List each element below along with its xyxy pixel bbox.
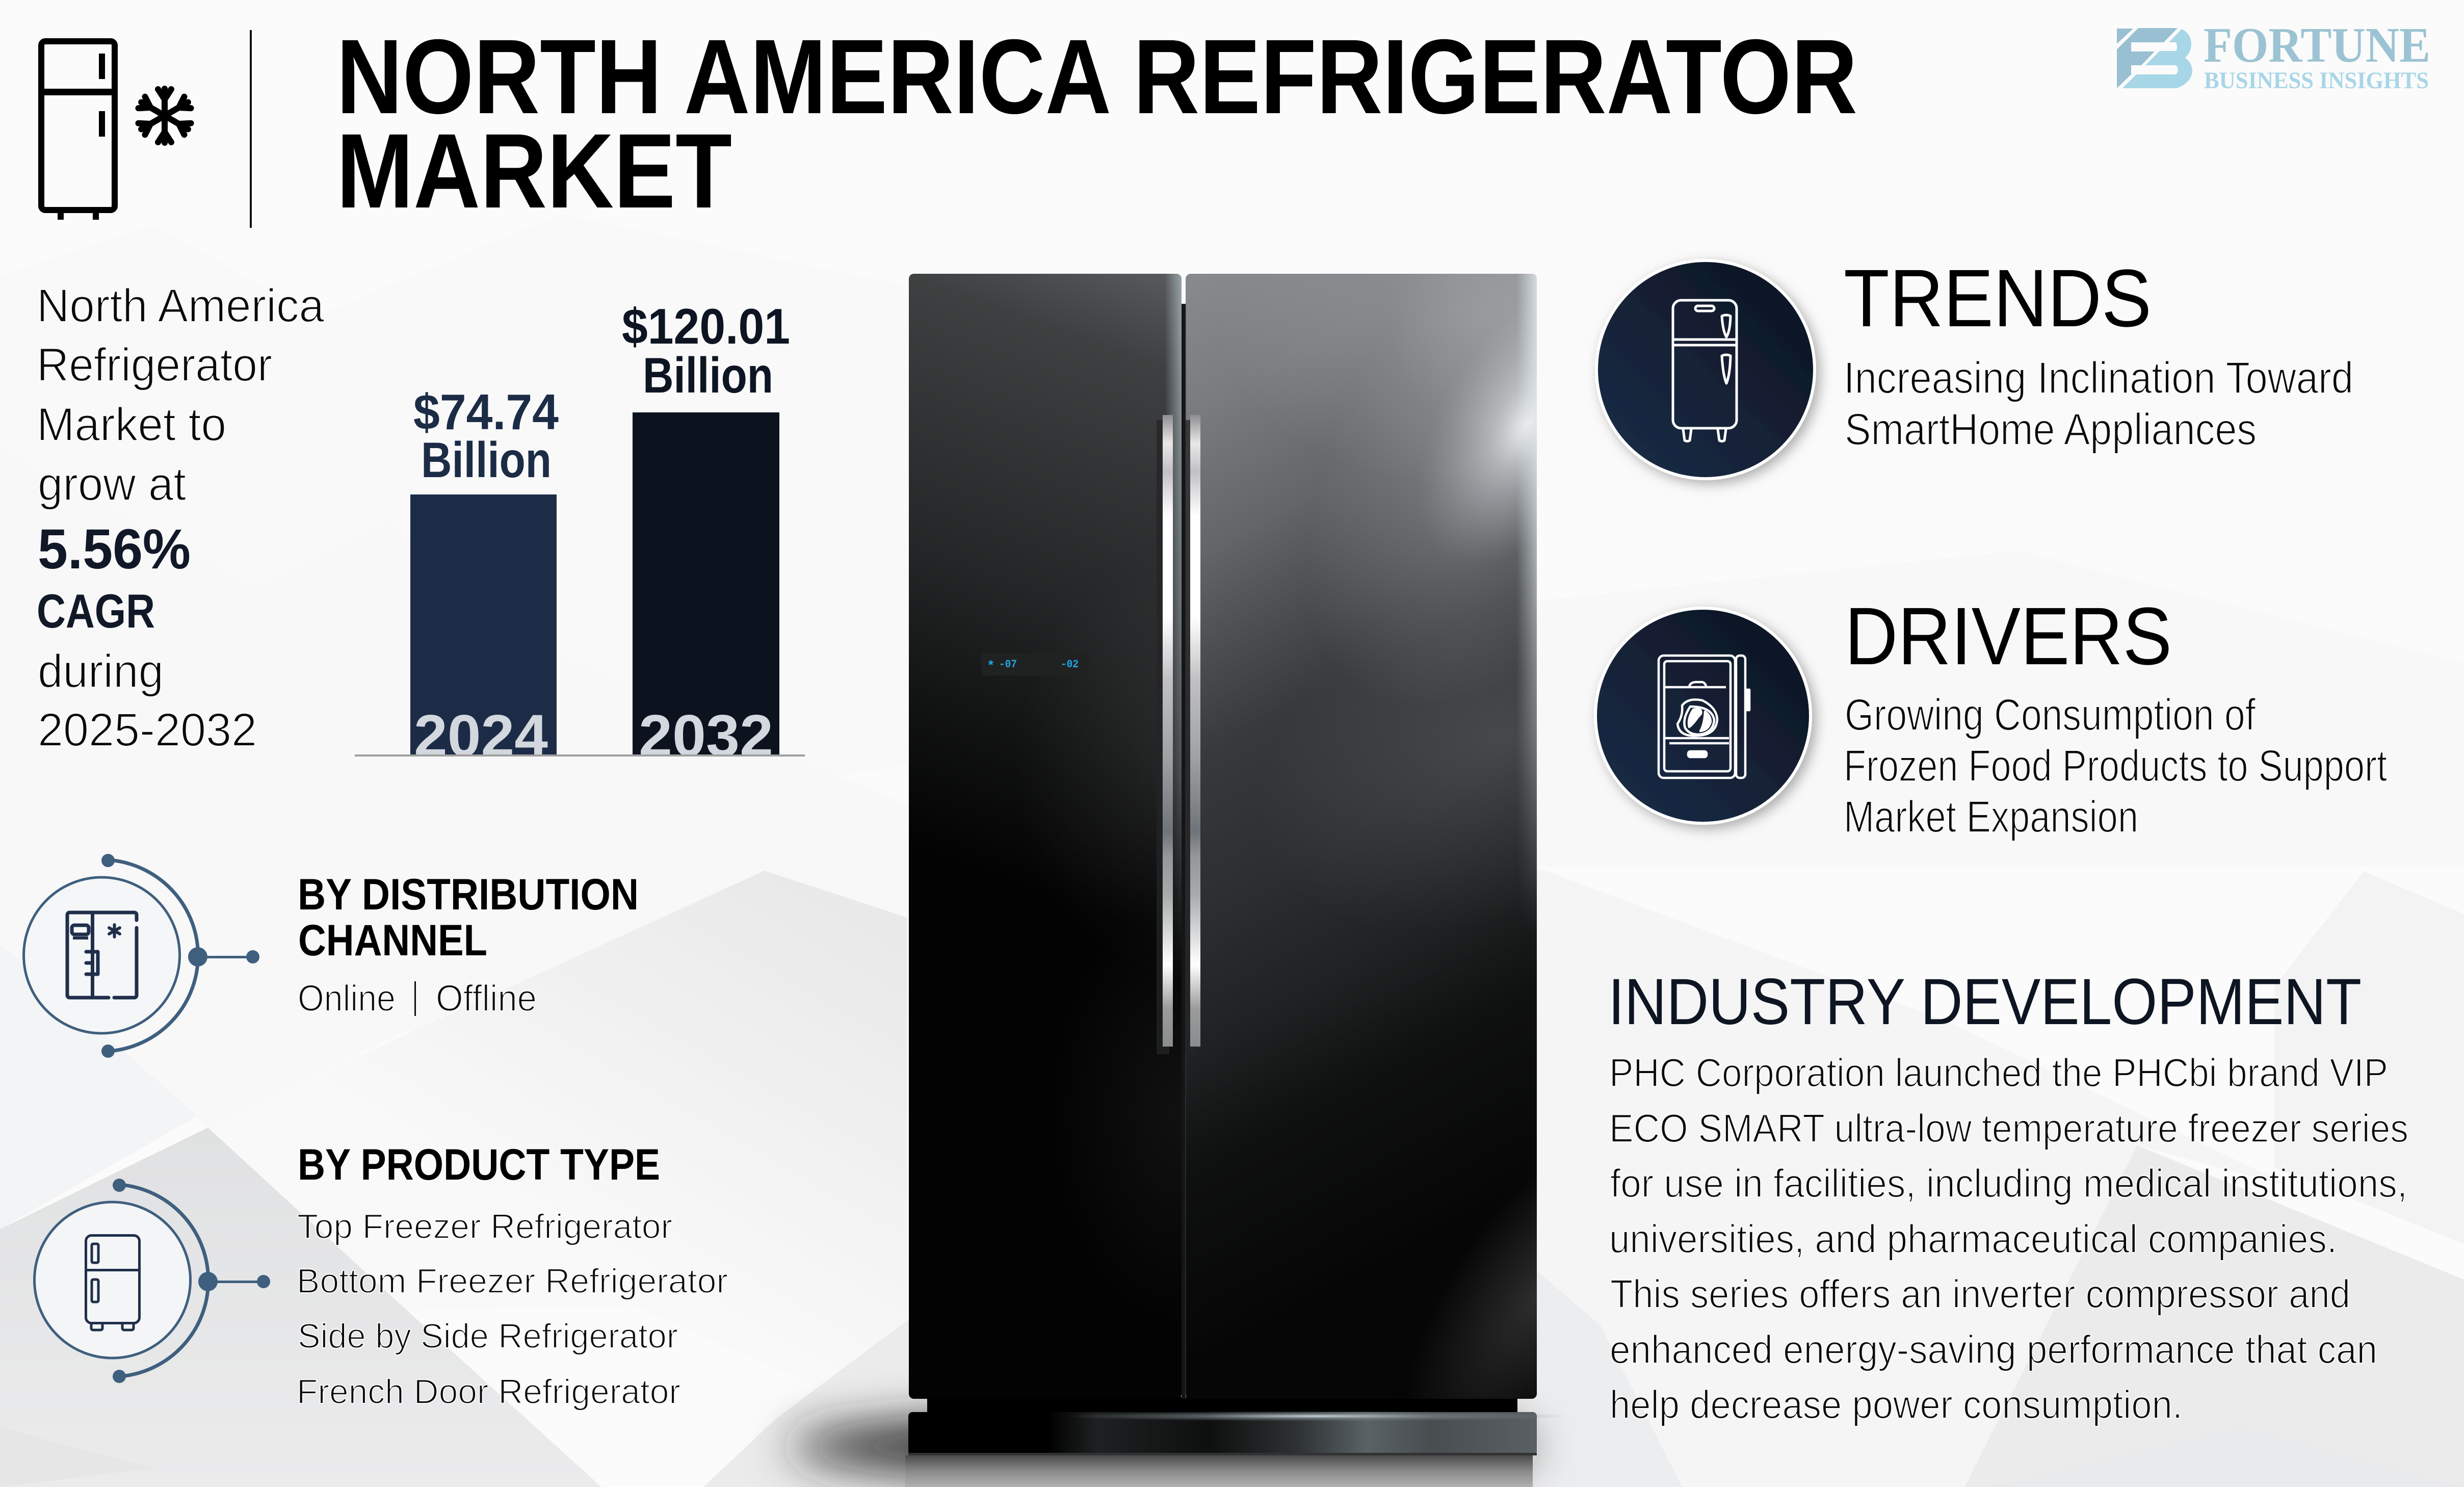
header divider bbox=[250, 30, 252, 228]
heading: trends: Increasing Inclination Toward bbox=[1844, 353, 2353, 403]
heading: trends: SmartHome Appliances bbox=[1845, 405, 2257, 454]
logo: Fortune Business Insights: FORTUNE bbox=[2204, 18, 2430, 72]
text block: by distribution channel: CHANNEL bbox=[298, 916, 487, 965]
text block: by distribution channel: Offline bbox=[436, 978, 537, 1019]
left door bbox=[909, 274, 1182, 1399]
plinth and base bbox=[908, 1397, 1572, 1455]
text block: industry development: INDUSTRY DEVELOPMENT bbox=[1608, 966, 2362, 1038]
text block: by product type: Top Freezer Refrigerator bbox=[297, 1207, 672, 1246]
bar chart: market size 2024 vs 2032: Billion bbox=[643, 347, 773, 403]
right door bbox=[1185, 274, 1537, 1399]
digital display bbox=[981, 653, 1088, 675]
text block: by product type: Bottom Freezer Refrigerator bbox=[297, 1262, 728, 1300]
text block: industry development: for use in facilities, including medical institutions, bbox=[1610, 1161, 2407, 1206]
title bbox=[336, 18, 1857, 230]
text block: by product type bbox=[297, 1140, 728, 1411]
text block: CAGR statement: CAGR bbox=[37, 584, 155, 638]
bar chart: market size 2024 vs 2032: 2024 bbox=[414, 702, 548, 769]
text block: industry development: enhanced energy-saving performance that can bbox=[1610, 1327, 2377, 1372]
text block: CAGR statement: Refrigerator bbox=[37, 339, 272, 391]
title: NORTH AMERICA REFRIGERATOR bbox=[336, 18, 1857, 136]
seam strip between doors bbox=[1182, 304, 1186, 1399]
text block: by product type: French Door Refrigerator bbox=[297, 1372, 680, 1411]
text block: industry development: PHC Corporation launched the PHCbi brand VIP bbox=[1609, 1050, 2388, 1095]
bar chart: market size 2024 vs 2032: Billion bbox=[421, 432, 552, 488]
text block: by product type: Side by Side Refrigerator bbox=[298, 1317, 678, 1355]
drivers circle icon bbox=[1595, 608, 1811, 823]
text block: CAGR statement: Market to bbox=[37, 399, 226, 451]
digital display: * bbox=[987, 659, 995, 674]
heading: drivers: Growing Consumption of bbox=[1845, 690, 2256, 740]
floor shadow bbox=[790, 1415, 1534, 1487]
door handles bbox=[1157, 415, 1200, 1054]
text block: CAGR statement: during bbox=[38, 645, 164, 697]
text block: industry development bbox=[1608, 966, 2408, 1427]
digital display: -02 bbox=[1061, 658, 1079, 671]
text block: CAGR statement: 5.56% bbox=[38, 518, 191, 581]
text block: CAGR statement: North America bbox=[37, 280, 325, 332]
text block: by product type: BY PRODUCT TYPE bbox=[298, 1140, 660, 1189]
logo: Fortune Business Insights: BUSINESS INSIGHTS bbox=[2204, 67, 2429, 94]
text block: industry development: help decrease power consumption. bbox=[1610, 1382, 2183, 1427]
text block: CAGR statement: 2025-2032 bbox=[38, 704, 257, 756]
text block: by distribution channel bbox=[298, 870, 639, 1019]
heading: drivers bbox=[1844, 590, 2387, 842]
trends circle icon bbox=[1596, 260, 1815, 479]
icon: refrigerator with snowflake bbox=[41, 41, 191, 220]
icon: distribution channel ring bbox=[23, 854, 259, 1058]
bar chart: market size 2024 vs 2032: $120.01 bbox=[622, 298, 790, 354]
logo: Fortune Business Insights bbox=[2117, 18, 2430, 94]
text block: industry development: This series offers an inverter compressor and bbox=[1610, 1271, 2350, 1316]
refrigerator illustration bbox=[768, 274, 1562, 1487]
bar chart: market size 2024 vs 2032 bbox=[355, 298, 805, 769]
title: MARKET bbox=[336, 112, 732, 230]
text block: by distribution channel: BY DISTRIBUTION bbox=[298, 870, 639, 919]
bar chart: market size 2024 vs 2032: $74.74 bbox=[413, 384, 559, 440]
icon: product type ring bbox=[35, 1179, 270, 1383]
text block: by distribution channel: Online bbox=[298, 978, 396, 1019]
bar chart: market size 2024 vs 2032: 2032 bbox=[639, 702, 773, 769]
heading: trends bbox=[1844, 252, 2353, 454]
heading: trends: TRENDS bbox=[1844, 252, 2152, 344]
heading: drivers: Market Expansion bbox=[1844, 792, 2138, 842]
heading: drivers: DRIVERS bbox=[1845, 590, 2172, 682]
text block: industry development: universities, and pharmaceutical companies. bbox=[1609, 1216, 2337, 1261]
text block: CAGR statement: grow at bbox=[38, 458, 186, 510]
digital display: -07 bbox=[999, 658, 1017, 671]
text block: industry development: ECO SMART ultra-low temperature freezer series bbox=[1609, 1106, 2408, 1151]
text block: CAGR statement bbox=[37, 280, 325, 756]
